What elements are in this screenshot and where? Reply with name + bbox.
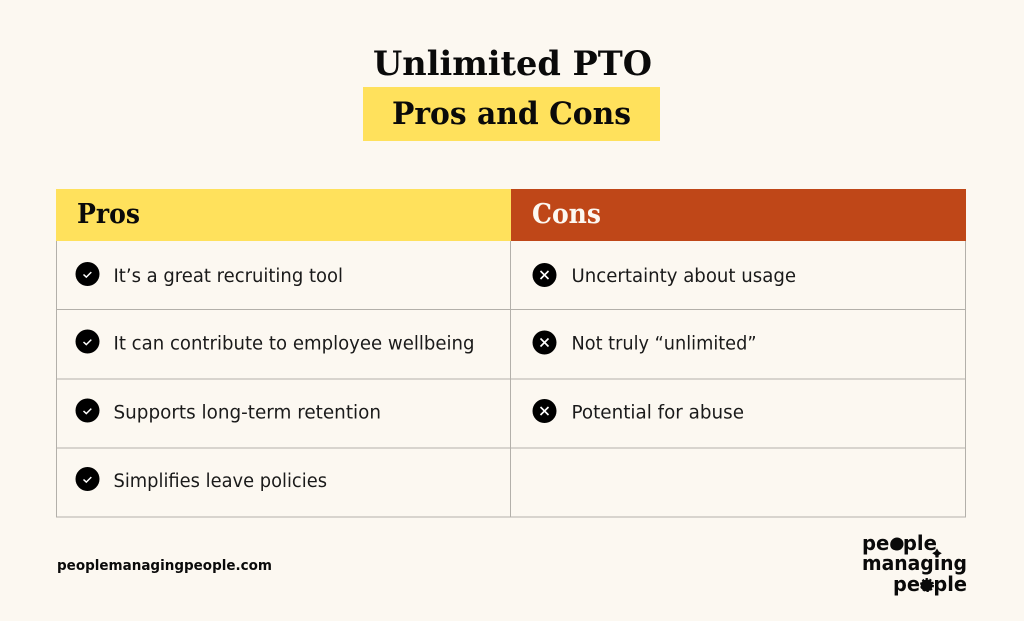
pro item 2: It can contribute to employee wellbeing bbox=[114, 334, 474, 354]
pro item 4: Simplifies leave policies bbox=[114, 471, 327, 492]
pros header bbox=[56, 189, 511, 241]
logo: people bbox=[862, 531, 937, 555]
pros header: Pros bbox=[77, 199, 140, 230]
title: Unlimited PTO bbox=[373, 44, 652, 84]
con item 2 bbox=[532, 330, 756, 354]
subtitle highlight: Pros and Cons bbox=[392, 96, 631, 132]
pro item 3: Supports long-term retention bbox=[114, 402, 381, 424]
pro item 1: It’s a great recruiting tool bbox=[114, 266, 343, 287]
pro item 4 bbox=[76, 467, 327, 492]
con item 2: Not truly “unlimited” bbox=[572, 334, 756, 354]
grid lines bbox=[56, 241, 966, 517]
con item 3 bbox=[532, 399, 744, 424]
cons header: Cons bbox=[532, 199, 601, 230]
logo: managing bbox=[862, 551, 967, 575]
logo bbox=[862, 531, 967, 596]
cons header bbox=[511, 189, 966, 241]
subtitle highlight bbox=[363, 87, 660, 141]
con item 1: Uncertainty about usage bbox=[572, 266, 796, 287]
logo: people bbox=[893, 572, 967, 596]
con item 3: Potential for abuse bbox=[572, 402, 744, 424]
footer url: peoplemanagingpeople.com bbox=[57, 558, 272, 574]
panel: pros and cons table bbox=[56, 189, 966, 517]
